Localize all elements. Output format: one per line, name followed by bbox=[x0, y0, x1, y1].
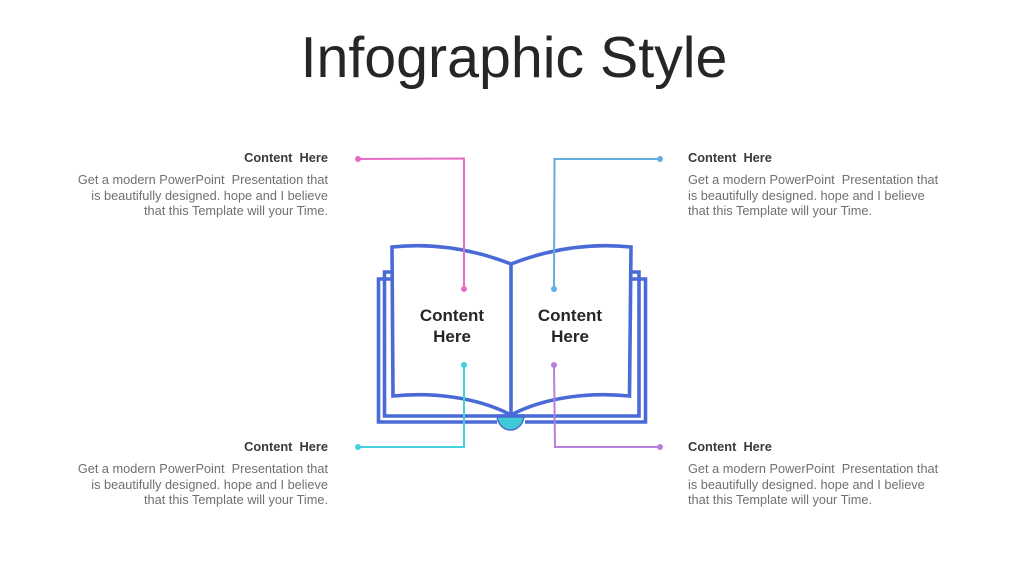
connector: cyan bbox=[355, 362, 467, 450]
label: right page: Here bbox=[551, 327, 589, 346]
text block: bottom left: Content Here bbox=[244, 439, 328, 454]
label: right page: Content bbox=[538, 306, 602, 325]
text block: top right: Get a modern PowerPoint Presentation that is beautifully designed. hope and I believe that this Template will your Time. bbox=[688, 172, 938, 218]
text block: bottom left bbox=[78, 439, 328, 507]
connector: pink bbox=[355, 156, 467, 292]
connector: purple bbox=[551, 362, 663, 450]
text block: top left: Content Here bbox=[244, 150, 328, 165]
label: left page: Here bbox=[433, 327, 471, 346]
text block: bottom right: Get a modern PowerPoint Presentation that is beautifully designed. hope and I believe that this Template will your Time. bbox=[688, 461, 938, 507]
title: Infographic Style bbox=[301, 26, 727, 90]
text block: bottom right: Content Here bbox=[688, 439, 772, 454]
text block: top right bbox=[688, 150, 938, 218]
text block: bottom right bbox=[688, 439, 938, 507]
text block: top right: Content Here bbox=[688, 150, 772, 165]
label: left page: Content bbox=[420, 306, 484, 325]
text block: top left: Get a modern PowerPoint Presentation that is beautifully designed. hope and I believe that this Template will your Time. bbox=[78, 172, 328, 218]
text block: bottom left: Get a modern PowerPoint Presentation that is beautifully designed. hope and I believe that this Template will your Time. bbox=[78, 461, 328, 507]
icon: open book bbox=[378, 246, 646, 430]
connector: blue bbox=[551, 156, 663, 292]
text block: top left bbox=[78, 150, 328, 218]
